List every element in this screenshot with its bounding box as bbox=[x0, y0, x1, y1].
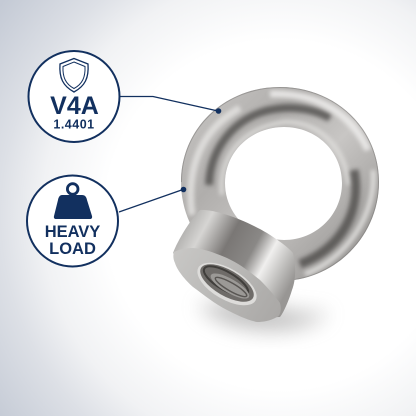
icon: weight bbox=[54, 184, 92, 219]
nut front face bbox=[173, 248, 281, 322]
nut body bbox=[173, 210, 295, 318]
V4A label: V4A bbox=[50, 92, 99, 120]
threaded hole bbox=[191, 254, 263, 314]
HEAVY LOAD label: LOAD bbox=[49, 240, 96, 258]
connector line: V4A bbox=[120, 96, 221, 114]
badge: heavy load bbox=[27, 176, 118, 266]
connector line: heavy load bbox=[119, 187, 186, 212]
eye nut product photo bbox=[173, 80, 385, 322]
drop shadow under eye nut bbox=[198, 300, 330, 330]
HEAVY LOAD label: HEAVY bbox=[45, 223, 100, 241]
1.4401 label: 1.4401 bbox=[53, 118, 95, 132]
icon: shield bbox=[60, 58, 88, 92]
HEAVY LOAD label bbox=[45, 223, 100, 258]
badge: V4A bbox=[28, 51, 120, 142]
ring bbox=[181, 87, 379, 280]
